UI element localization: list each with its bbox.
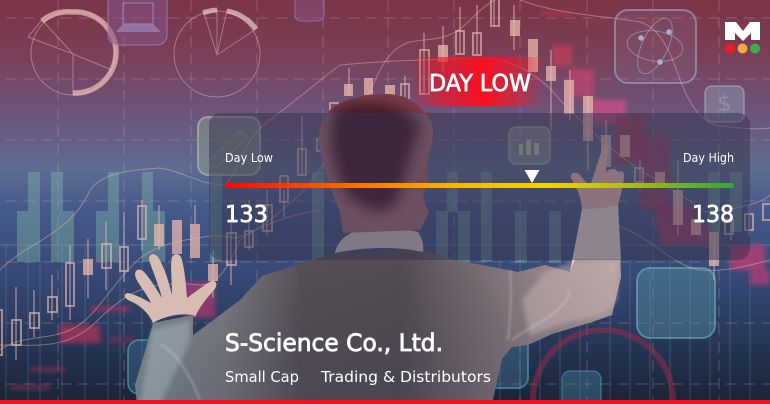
icon: blue tile lower left — [128, 340, 188, 394]
left hand — [125, 254, 216, 323]
logo — [725, 22, 760, 54]
label: day low: Day Low — [225, 151, 273, 165]
sector tag: Trading & Distributors — [320, 368, 491, 386]
person — [125, 90, 624, 404]
lower forearm highlight — [522, 262, 617, 336]
value: high: 138 — [692, 202, 734, 228]
sleeve highlight — [140, 320, 190, 404]
market cap tag: Small Cap — [225, 368, 299, 386]
forearm highlight — [570, 205, 621, 272]
bottom red bar — [0, 400, 770, 404]
shirt folds — [160, 270, 570, 400]
marker triangle — [524, 170, 540, 183]
icon: dollar tile — [705, 86, 744, 122]
thin vertical chart lines — [0, 245, 770, 400]
icon: laptop tile — [108, 0, 167, 45]
right hand — [571, 145, 624, 209]
icon: partial tile top — [295, 0, 324, 21]
head and neck — [315, 90, 435, 235]
teal bars — [17, 172, 742, 263]
panel: day range backdrop — [209, 113, 750, 260]
collar — [335, 229, 423, 253]
red label: day low — [410, 57, 545, 106]
label: day high: Day High — [683, 151, 734, 165]
pie chart outline left — [28, 11, 116, 95]
red label: day low: DAY LOW — [429, 71, 531, 97]
icon: blue tile lower centre — [488, 333, 528, 388]
icon: blue tile bottom — [562, 371, 601, 404]
icon: pencil tile — [198, 117, 260, 175]
icon: bar chart tile — [509, 127, 550, 164]
icon: atom tile — [615, 10, 696, 83]
value: low: 133 — [225, 202, 268, 228]
pie chart outline centre — [174, 9, 260, 97]
icon: blue tile right — [637, 268, 715, 338]
icon: dollar tile: $ — [718, 92, 732, 117]
company name: S-Science Co., Ltd. — [225, 329, 443, 357]
shirt torso and arms — [135, 205, 621, 404]
ear — [417, 164, 429, 197]
red ring arc — [533, 330, 673, 400]
range slider — [225, 183, 734, 188]
